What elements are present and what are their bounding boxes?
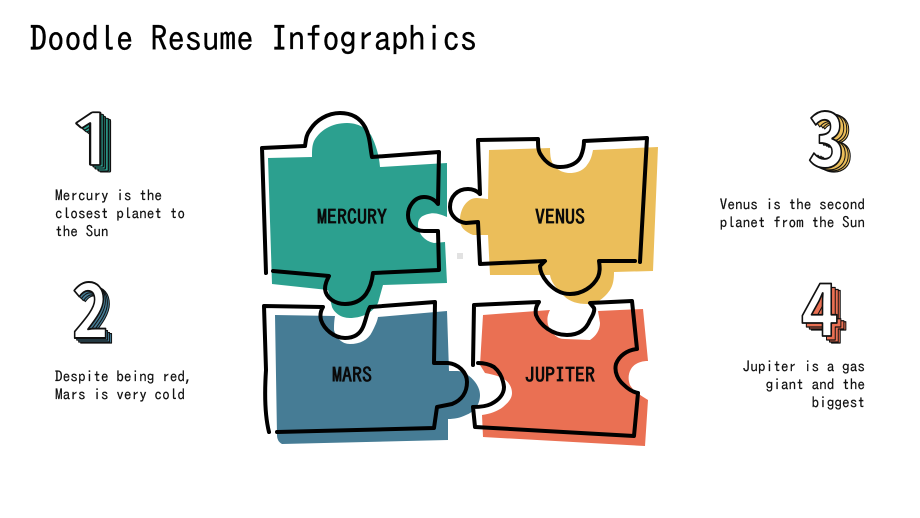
text block: jupiter description: biggest	[811, 395, 865, 410]
label: venus: VENUS	[535, 207, 585, 227]
icon: number 1: 1	[72, 113, 130, 182]
icon: number 4: 4	[801, 251, 839, 357]
label: jupiter: JUPITER	[525, 365, 595, 385]
icon: number 3: 3	[815, 83, 852, 193]
icon: number 2: 2	[72, 251, 109, 361]
icon: number 3: 3	[808, 80, 845, 190]
icon: number 3: 3	[812, 82, 849, 192]
text block: mercury description: closest planet to	[55, 206, 185, 221]
icon: number 4: 4	[808, 257, 846, 363]
text block: venus description: planet from the Sun	[720, 215, 865, 230]
text block: mars description: Despite being red,	[55, 369, 193, 384]
text block: mercury description: the Sun	[55, 224, 109, 239]
icon: number 2: 2	[76, 255, 113, 365]
panel: mars puzzle piece	[264, 302, 480, 444]
text block: mercury description: Mercury is the	[55, 188, 162, 203]
icon: number 2: 2	[74, 253, 111, 363]
text block: mars description: Mars is very cold	[55, 387, 185, 402]
panel: venus puzzle piece	[450, 138, 658, 304]
text block: jupiter description: giant and the	[766, 377, 865, 392]
text block: venus description: Venus is the second	[720, 197, 865, 212]
panel: jupiter puzzle piece	[473, 301, 648, 446]
icon: number 4: 4	[805, 255, 843, 361]
icon: number 1: 1	[69, 111, 127, 180]
title: Doodle Resume Infographics	[30, 22, 477, 56]
icon: number 2: 2	[78, 256, 115, 366]
icon: number 4: 4	[810, 258, 848, 364]
icon: number 1: 1	[67, 109, 125, 178]
icon: number 1: 1	[64, 107, 122, 176]
text block: jupiter description: Jupiter is a gas	[743, 359, 865, 374]
icon: number 3: 3	[817, 84, 854, 194]
label: mars: MARS	[332, 365, 372, 385]
icon: number 1: 1	[74, 114, 132, 183]
label: mercury: MERCURY	[317, 207, 387, 227]
panel: mercury puzzle piece	[262, 113, 447, 318]
small grey marker	[457, 253, 463, 259]
